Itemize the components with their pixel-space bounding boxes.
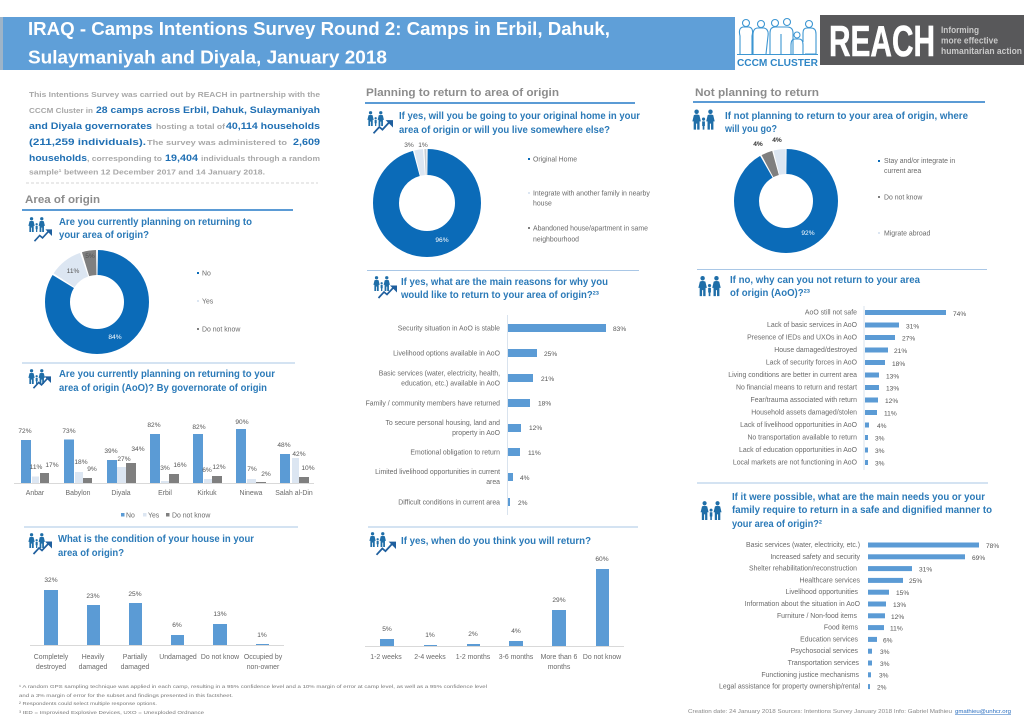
horizontal bar chart: main needs: Basic services (water, electricity, etc.): [746, 542, 860, 549]
bar chart: when: 2-4 weeks: [414, 654, 446, 661]
donut chart: original home: 1%: [418, 142, 428, 149]
bar chart: house condition: non-owner: [247, 664, 280, 671]
question: reasons: If yes, what are the main reasons for why you: [401, 277, 608, 288]
intro text block: and Diyala governorates: [29, 121, 152, 131]
heading: not planning to return: Not planning to return: [695, 87, 819, 99]
horizontal bar chart: main needs: 69%: [972, 555, 985, 562]
grouped bar chart: governorates: 9%: [87, 466, 97, 473]
horizontal bar chart: main needs: 31%: [919, 566, 932, 574]
bar chart: when: 1-2 weeks: [370, 654, 402, 661]
panel: by governorate of origin: [14, 369, 315, 520]
bar chart: when: 2%: [468, 631, 478, 638]
grouped bar chart: governorates: 34%: [131, 446, 145, 453]
horizontal bar chart: why not return: 18%: [892, 361, 905, 368]
grouped bar chart: governorates: Ninewa: [240, 490, 263, 497]
horizontal bar chart: main needs: 15%: [896, 590, 909, 597]
horizontal bar chart: reasons: 18%: [538, 400, 551, 408]
question: main needs: If it were possible, what are the main needs you or your: [732, 492, 985, 503]
horizontal bar chart: main needs: Education services: [800, 636, 859, 643]
logo: CCCM cluster: CCCM CLUSTER: [737, 58, 819, 69]
legend: governorates: [121, 512, 210, 520]
horizontal bar chart: why not return: 13%: [886, 386, 899, 392]
legend: original home: [528, 156, 650, 244]
horizontal bar chart: main needs: Information about the situation in AoO: [745, 601, 861, 608]
grouped bar chart: governorates: Erbil: [158, 490, 172, 497]
donut chart: planning to return: [58, 253, 136, 342]
grouped bar chart: governorates: 27%: [117, 456, 131, 463]
donut chart: planning to return: 84%: [108, 334, 122, 341]
horizontal bar chart: reasons: property in AoO: [452, 430, 501, 437]
horizontal bar chart: reasons: 2%: [518, 500, 528, 507]
question: main needs: family require to return in a safe and dignified manner to: [732, 505, 992, 516]
horizontal bar chart: why not return: No financial means to return and restart: [736, 384, 857, 392]
horizontal bar chart: reasons: Security situation in AoO is stable: [398, 326, 500, 332]
legend: original home: neighbourhood: [533, 236, 579, 244]
logo: REACH: more effective: [941, 36, 998, 46]
bar chart: when: 1%: [425, 632, 435, 639]
horizontal bar chart: reasons: area: [486, 479, 500, 486]
panel: why not return: [698, 275, 966, 470]
horizontal bar chart: reasons: 4%: [520, 475, 530, 482]
horizontal bar chart: why not return: House damaged/destroyed: [774, 347, 857, 354]
horizontal bar chart: main needs: 2%: [877, 684, 887, 692]
bar chart: when: More than 6: [541, 654, 578, 661]
logo: REACH: REACH: [829, 17, 935, 66]
horizontal bar chart: main needs: Transportation services: [788, 660, 860, 667]
horizontal bar chart: main needs: Increased safety and security: [770, 554, 861, 561]
panel: condition of house: [28, 533, 284, 671]
grouped bar chart: governorates: 6%: [202, 467, 212, 474]
question: original home: If yes, will you be going to your original home in your: [399, 111, 640, 122]
horizontal bar chart: reasons: To secure personal housing, land and: [385, 420, 500, 427]
footer: credits: gmathieu@unhcr.org: [955, 709, 1011, 715]
bar chart: when: 29%: [552, 597, 566, 604]
horizontal bar chart: main needs: Legal assistance for property ownership/rental: [719, 684, 860, 691]
grouped bar chart: governorates: 11%: [30, 464, 42, 471]
bar chart: house condition: Undamaged: [159, 654, 197, 661]
horizontal bar chart: why not return: Fear/trauma associated with return: [751, 397, 857, 404]
question: why not return: If no, why can you not return to your area: [730, 275, 921, 286]
bar chart: house condition: 1%: [257, 632, 267, 639]
horizontal bar chart: why not return: 74%: [953, 311, 966, 318]
horizontal bar chart: main needs: Furniture / Non-food items: [777, 613, 858, 620]
legend: where will you go: Stay and/or integrate in: [884, 158, 955, 165]
intro text block: households: [29, 153, 87, 163]
donut chart: where will you go: 92%: [801, 230, 815, 237]
horizontal bar chart: why not return: AoO still not safe: [805, 310, 857, 316]
donut chart: planning to return: 5%: [85, 253, 95, 260]
grouped bar chart: governorates: 18%: [74, 459, 88, 466]
horizontal bar chart: why not return: [728, 306, 966, 470]
heading: planning to return: Planning to return to area of origin: [366, 87, 559, 99]
horizontal bar chart: why not return: Living conditions are better in current area: [728, 372, 857, 379]
horizontal bar chart: main needs: 3%: [880, 661, 890, 668]
horizontal bar chart: main needs: 6%: [883, 638, 893, 644]
bar chart: house condition: 6%: [172, 622, 182, 629]
grouped bar chart: governorates: 17%: [45, 462, 59, 469]
icon: family: [698, 276, 721, 296]
horizontal bar chart: why not return: 4%: [877, 423, 887, 430]
icon: family: [692, 110, 715, 130]
horizontal bar chart: main needs: 13%: [893, 602, 906, 609]
horizontal bar chart: why not return: 13%: [886, 374, 899, 380]
footer: credits: Creation date: 24 January 2018 Sources: Intentions Survey January 2018 Info: Gabriel Mathieu: [688, 709, 952, 715]
legend: planning to return: [197, 270, 240, 334]
donut chart: where will you go: 4%: [772, 137, 782, 144]
bar chart: when: 1-2 months: [456, 654, 491, 661]
grouped bar chart: governorates: 90%: [235, 419, 249, 426]
bar chart: when: 4%: [511, 628, 521, 635]
header band: [0, 17, 735, 70]
grouped bar chart: governorates: 42%: [292, 451, 306, 458]
icon: family: [701, 501, 722, 520]
donut chart: original home: 96%: [435, 237, 449, 244]
panel: planning to return: [365, 87, 650, 244]
bar chart: house condition: Partially: [123, 654, 148, 661]
question: main needs: [732, 492, 992, 530]
bar chart: when: 3-6 months: [499, 654, 534, 661]
bar chart: house condition: Heavily: [82, 654, 105, 661]
horizontal bar chart: reasons: Limited livelihood opportunities in current: [375, 469, 500, 476]
footnotes: ¹ A random GPS sampling technique was applied in each camp, resulting in a 95% confidence level and a 10% margin of error at camp level, as well as a 95% confidence level: [19, 684, 487, 690]
horizontal bar chart: reasons: Basic services (water, electricity, health,: [379, 370, 500, 378]
grouped bar chart: governorates: 82%: [192, 424, 206, 431]
grouped bar chart: governorates: 73%: [62, 428, 76, 435]
legend: original home: Abandoned house/apartment in same: [533, 226, 648, 232]
title: [28, 19, 610, 68]
question: where will you go: If not planning to return to your area of origin, where: [725, 111, 969, 122]
panel: area of origin: [22, 194, 293, 342]
donut chart: planning to return: 11%: [67, 268, 79, 275]
horizontal bar chart: why not return: 3%: [875, 460, 885, 468]
grouped bar chart: governorates: 16%: [173, 462, 187, 469]
footnotes: [19, 684, 487, 716]
question: reasons: [400, 277, 608, 301]
horizontal bar chart: main needs: 11%: [890, 626, 903, 632]
bar chart: house condition: destroyed: [36, 664, 66, 671]
question: original home: [399, 111, 640, 136]
panel: not planning to return: [692, 87, 985, 240]
horizontal bar chart: main needs: Functioning justice mechanisms: [761, 672, 860, 679]
bar chart: house condition: 32%: [44, 577, 58, 584]
footnotes: and a 3% margin of error for the subset and findings presented in this factsheet.: [19, 693, 233, 699]
intro text block: [29, 90, 320, 176]
icon: family with arrow: [373, 276, 397, 298]
panel: reasons to return: [366, 276, 626, 515]
panel: main needs: [701, 492, 999, 692]
horizontal bar chart: reasons: Difficult conditions in current area: [398, 500, 500, 506]
horizontal bar chart: reasons: 11%: [528, 450, 541, 457]
question: house condition: [58, 534, 254, 559]
footnotes: ² Respondents could select multiple response options.: [19, 701, 157, 707]
grouped bar chart: governorates: Anbar: [26, 490, 45, 497]
grouped bar chart: governorates: 82%: [147, 422, 161, 429]
intro text block: CCCM Cluster in: [29, 106, 93, 115]
logo: REACH: Informing: [941, 25, 979, 35]
horizontal bar chart: main needs: Livelihood opportunities: [786, 589, 859, 596]
horizontal bar chart: reasons: 12%: [529, 425, 542, 432]
grouped bar chart: governorates: 2%: [261, 471, 271, 478]
legend: original home: house: [533, 200, 552, 208]
question: why not return: of origin (AoO)?²³: [730, 288, 811, 299]
grouped bar chart: governorates: Kirkuk: [197, 490, 217, 497]
horizontal bar chart: reasons: Livelihood options available in AoO: [393, 350, 501, 358]
horizontal bar chart: main needs: Shelter rehabilitation/reconstruction: [749, 566, 857, 573]
bar chart: when: [365, 556, 624, 671]
icon: family with arrow: [28, 533, 52, 554]
grouped bar chart: governorates: 48%: [277, 442, 291, 449]
bar chart: house condition: 13%: [213, 611, 227, 618]
bar chart: when: 60%: [595, 556, 609, 563]
bar chart: house condition: Completely: [34, 654, 69, 661]
intro text block: individuals through a random: [201, 154, 320, 163]
icon: family with arrow: [367, 111, 393, 133]
panel: when to return: [365, 532, 624, 671]
horizontal bar chart: main needs: 3%: [879, 672, 889, 680]
title: Sulaymaniyah and Diyala, January 2018: [28, 48, 387, 68]
question: planning to return: Are you currently planning on returning to: [59, 217, 252, 228]
horizontal bar chart: why not return: Lack of livelihood opportunities in AoO: [740, 422, 858, 429]
grouped bar chart: governorates: 3%: [160, 465, 170, 472]
intro text block: , corresponding to: [87, 154, 162, 163]
question: where will you go: will you go?: [724, 124, 777, 135]
horizontal bar chart: reasons: education, etc.) available in AoO: [401, 380, 501, 388]
bar chart: when: Do not know: [583, 654, 621, 661]
legend: where will you go: [878, 158, 955, 238]
heading: area of origin: Area of origin: [25, 194, 100, 206]
horizontal bar chart: why not return: Local markets are not functioning in AoO: [733, 460, 858, 466]
horizontal bar chart: main needs: Food items: [824, 625, 859, 632]
question: main needs: your area of origin?²: [732, 519, 823, 530]
donut chart: where will you go: [746, 137, 826, 240]
horizontal bar chart: why not return: Presence of IEDs and UXOs in AoO: [747, 334, 858, 342]
logo: REACH: humanitarian action: [941, 46, 1022, 56]
icon: family with arrow: [28, 369, 51, 388]
horizontal bar chart: reasons: 83%: [613, 326, 626, 333]
grouped bar chart: governorates: Diyala: [111, 490, 131, 497]
horizontal bar chart: why not return: 3%: [875, 448, 885, 455]
question: reasons: would like to return to your area of origin?²³: [400, 290, 600, 301]
horizontal bar chart: reasons: 21%: [541, 376, 554, 383]
horizontal bar chart: why not return: 11%: [884, 410, 897, 418]
question: why not return: [730, 275, 921, 299]
legend: governorates: Yes: [148, 512, 160, 520]
question: house condition: What is the condition of your house in your: [58, 534, 254, 545]
intro text block: The survey was administered to: [147, 138, 287, 147]
horizontal bar chart: main needs: [719, 542, 999, 692]
horizontal bar chart: main needs: Healthcare services: [799, 577, 861, 584]
bar chart: house condition: [30, 577, 284, 671]
intro text block: (211,259 individuals).: [29, 137, 146, 147]
bar chart: house condition: damaged: [79, 664, 108, 671]
horizontal bar chart: main needs: Psychosocial services: [791, 648, 859, 655]
legend: where will you go: Do not know: [884, 194, 922, 202]
horizontal bar chart: why not return: Lack of security forces in AoO: [766, 360, 858, 366]
horizontal bar chart: reasons: [366, 315, 626, 515]
bar chart: house condition: Occupied by: [244, 654, 283, 661]
horizontal bar chart: why not return: 21%: [894, 348, 907, 355]
horizontal bar chart: reasons: 25%: [544, 351, 557, 358]
legend: where will you go: Migrate abroad: [884, 230, 931, 238]
intro text block: hosting a total of: [156, 122, 226, 131]
horizontal bar chart: main needs: 3%: [880, 649, 890, 656]
legend: governorates: No: [126, 512, 135, 520]
bar chart: when: months: [548, 664, 571, 671]
horizontal bar chart: why not return: 27%: [902, 336, 915, 342]
grouped bar chart: governorates: 39%: [104, 448, 118, 455]
horizontal bar chart: why not return: Household assets damaged/stolen: [751, 410, 857, 416]
grouped bar chart: governorates: 7%: [247, 466, 257, 473]
footer: credits: [688, 709, 1011, 715]
question: where will you go: [724, 111, 969, 135]
grouped bar chart: governorates: Babylon: [66, 490, 91, 497]
horizontal bar chart: main needs: 12%: [891, 614, 904, 621]
question: when: If yes, when do you think you will return?: [401, 536, 591, 547]
question: planning to return: your area of origin?: [59, 230, 149, 241]
footnotes: ³ IED = Improvised Explosive Devices, UXO = Unexploded Ordnance: [19, 710, 204, 716]
horizontal bar chart: why not return: 12%: [885, 398, 898, 405]
icon: family with arrow: [369, 532, 396, 555]
horizontal bar chart: why not return: Lack of basic services in AoO: [767, 322, 858, 329]
horizontal bar chart: why not return: 3%: [875, 436, 885, 442]
donut chart: where will you go: 4%: [753, 141, 763, 148]
question: by governorate: [59, 369, 275, 394]
question: house condition: area of origin?: [58, 548, 124, 559]
grouped bar chart: governorates: Salah al-Din: [275, 490, 313, 497]
legend: planning to return: Do not know: [202, 326, 240, 334]
intro text block: 19,404: [165, 153, 199, 163]
bar chart: house condition: 25%: [128, 591, 142, 598]
grouped bar chart: governorates: 72%: [18, 428, 32, 435]
question: by governorate: Are you currently planning on returning to your: [59, 369, 275, 380]
grouped bar chart: governorates: 12%: [212, 464, 226, 471]
horizontal bar chart: why not return: Lack of education opportunities in AoO: [739, 447, 858, 454]
question: by governorate: area of origin (AoO)? By governorate of origin: [59, 383, 267, 394]
legend: planning to return: Yes: [202, 298, 214, 306]
horizontal bar chart: why not return: No transportation available to return: [747, 434, 857, 442]
grouped bar chart: governorates: [14, 419, 315, 497]
horizontal bar chart: why not return: 31%: [906, 324, 919, 330]
horizontal bar chart: main needs: 78%: [986, 543, 999, 550]
intro text block: 28 camps across Erbil, Dahuk, Sulaymaniyah: [96, 105, 320, 115]
icon: family with arrow: [28, 217, 52, 241]
horizontal bar chart: main needs: 25%: [909, 578, 922, 585]
bar chart: house condition: damaged: [121, 664, 150, 671]
horizontal bar chart: reasons: Emotional obligation to return: [410, 450, 500, 456]
intro text block: This Intentions Survey was carried out by REACH in partnership with the: [29, 90, 320, 99]
legend: original home: Original Home: [533, 156, 577, 164]
legend: where will you go: current area: [884, 168, 921, 175]
donut chart: original home: 3%: [404, 142, 414, 149]
intro text block: 2,609: [293, 137, 320, 147]
intro text block: sample¹ between 12 December 2017 and 14 January 2018.: [29, 168, 265, 176]
legend: original home: Integrate with another family in nearby: [533, 190, 650, 198]
bar chart: house condition: 23%: [86, 593, 100, 600]
horizontal bar chart: reasons: Family / community members have returned: [366, 400, 500, 408]
question: planning to return: [59, 217, 252, 241]
bar chart: when: 5%: [382, 626, 392, 633]
logo: CCCM cluster: [737, 18, 819, 69]
legend: governorates: Do not know: [172, 512, 210, 520]
title: IRAQ - Camps Intentions Survey Round 2: Camps in Erbil, Dahuk,: [28, 19, 610, 39]
legend: planning to return: No: [202, 270, 211, 278]
intro text block: 40,114 households: [226, 121, 320, 131]
grouped bar chart: governorates: 10%: [301, 465, 315, 472]
question: original home: area of origin or will you live somewhere else?: [399, 125, 610, 136]
donut chart: original home: [386, 142, 468, 244]
bar chart: house condition: Do not know: [201, 654, 239, 661]
